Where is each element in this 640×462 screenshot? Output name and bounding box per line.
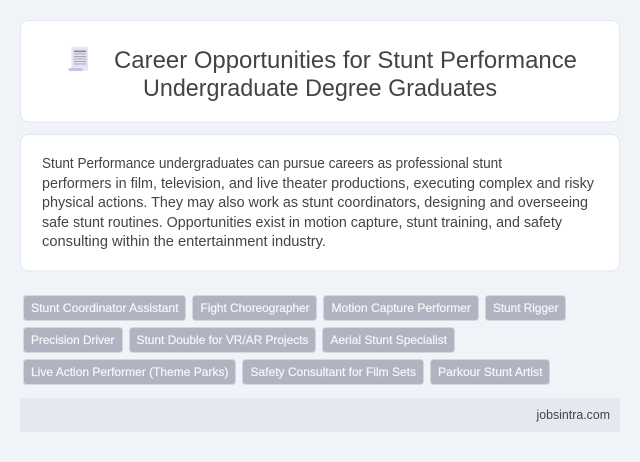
panel: description <box>20 134 620 271</box>
text block: description paragraph: Stunt Performance undergraduates can pursue careers as professional stunt <box>42 156 502 172</box>
tag: Motion Capture Performer <box>324 296 478 320</box>
tag: Fight Choreographer <box>192 296 316 320</box>
heading: title line 2: Undergraduate Degree Graduates <box>143 75 497 102</box>
text block: description paragraph <box>42 156 595 250</box>
tag: Stunt Coordinator Assistant: Stunt Coordinator Assistant <box>31 301 179 315</box>
tag: Live Action Performer (Theme Parks): Live Action Performer (Theme Parks) <box>31 365 228 379</box>
tag: Stunt Double for VR/AR Projects: Stunt Double for VR/AR Projects <box>136 333 308 347</box>
tag: Motion Capture Performer: Motion Capture Performer <box>332 301 471 315</box>
text block: description paragraph: performers in film, television, and live theater productions, executing complex and risky <box>42 176 595 192</box>
heading: title line 1: Career Opportunities for Stunt Performance <box>114 47 577 74</box>
tag: Safety Consultant for Film Sets: Safety Consultant for Film Sets <box>250 365 416 379</box>
tag: Stunt Double for VR/AR Projects <box>130 328 316 352</box>
tag: Stunt Rigger <box>486 296 566 320</box>
tag: Stunt Rigger: Stunt Rigger <box>493 301 559 315</box>
footer: source site: jobsintra.com <box>536 408 610 422</box>
text block: description paragraph: safe stunt routines. Opportunities exist in motion capture, stunt training, and safety <box>42 215 563 231</box>
tag: Live Action Performer (Theme Parks) <box>24 360 236 384</box>
tag: Aerial Stunt Specialist <box>322 328 454 352</box>
tag: Safety Consultant for Film Sets <box>242 360 424 384</box>
icon: paper scroll document <box>68 47 88 71</box>
text block: description paragraph: consulting within the entertainment industry. <box>42 234 326 250</box>
tag: Precision Driver <box>24 328 122 352</box>
text block: description paragraph: physical actions. They may also work as stunt coordinators, designing and overseeing <box>42 195 588 211</box>
footer bar <box>20 398 620 432</box>
tag: Stunt Coordinator Assistant <box>24 296 186 320</box>
tag: Parkour Stunt Artist: Parkour Stunt Artist <box>438 365 543 379</box>
panel: career tags <box>24 296 566 384</box>
tag: Parkour Stunt Artist <box>430 360 550 384</box>
tag: Fight Choreographer: Fight Choreographer <box>200 301 310 315</box>
tag: Aerial Stunt Specialist: Aerial Stunt Specialist <box>330 333 448 347</box>
panel: title header <box>20 20 620 122</box>
tag: Precision Driver: Precision Driver <box>31 333 115 347</box>
